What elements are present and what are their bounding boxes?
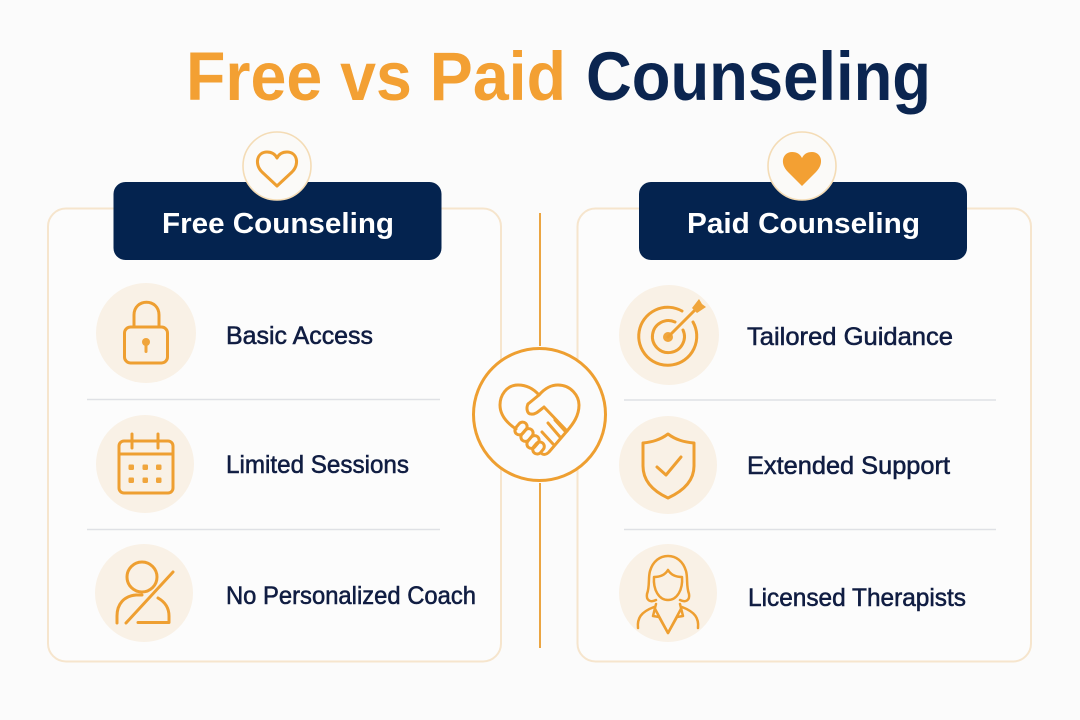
icon: solid heart badge [768,132,836,200]
title: Free vs Paid [186,38,566,115]
row: tailored guidance [619,285,953,385]
icon: central handshake heart [474,348,606,480]
row: basic access: Basic Access [226,322,373,350]
heading banner: free counseling [114,182,442,260]
icon: calendar [119,434,173,493]
row: licensed therapists [619,544,966,642]
icon: target with arrow [639,299,706,365]
title: Counseling [586,38,931,115]
panel: paid counseling [578,132,1031,662]
row: extended support: Extended Support [747,452,950,480]
heading banner: paid counseling: Paid Counseling [687,208,920,240]
row: no personalized coach [95,544,476,642]
row: limited sessions [96,415,409,513]
row: basic access [96,283,373,383]
icon: outline heart badge [243,132,311,200]
heading banner: free counseling: Free Counseling [162,208,394,240]
row: no personalized coach: No Personalized Coach [226,582,476,610]
center divider line [539,213,541,648]
row: limited sessions: Limited Sessions [226,451,409,479]
row: extended support [619,416,950,514]
icon: shield with check [643,434,694,498]
title [186,38,931,115]
heading banner: paid counseling [639,182,967,260]
icon: padlock [124,302,168,363]
panel: free counseling [48,132,501,662]
icon: crossed-out person [117,562,173,623]
row: tailored guidance: Tailored Guidance [747,323,953,351]
icon: female therapist [638,556,698,633]
row: licensed therapists: Licensed Therapists [748,584,966,612]
